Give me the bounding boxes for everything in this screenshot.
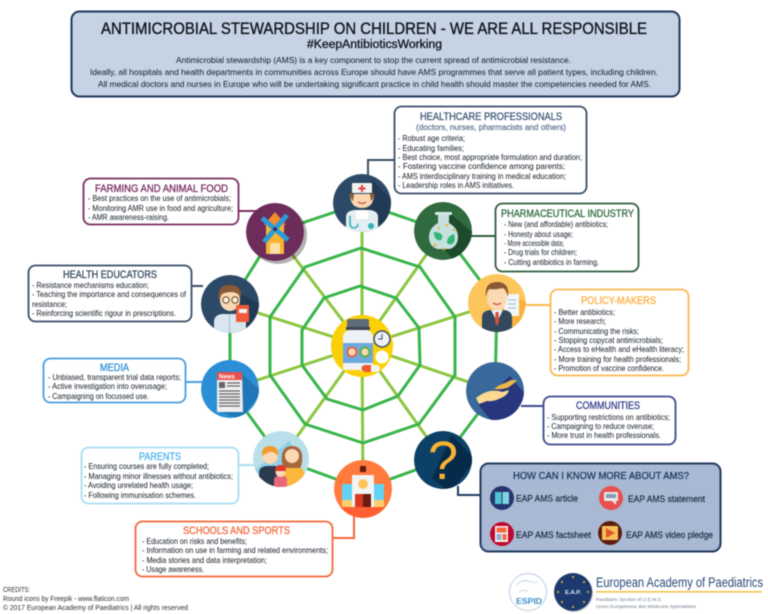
panel: farming and animal food: - Best practices on the use of antimicrobials; <box>88 194 231 203</box>
panel: policy-makers: POLICY-MAKERS <box>581 295 656 307</box>
icon: parents (family) <box>253 431 309 490</box>
credits: Round icons by Freepik - www.flaticon.com <box>3 594 129 603</box>
logo: ESPID: ESPID <box>516 597 542 606</box>
intro text: Antimicrobial stewardship (AMS) is a key component to stop the current spread of antimicrobial resistance. <box>176 55 571 65</box>
panel: policy-makers: - More training for health professionals; <box>554 355 681 364</box>
icon: question mark: ? <box>428 431 458 491</box>
panel: healthcare professionals <box>394 106 586 194</box>
panel: farming and animal food: - Monitoring AMR use in food and agriculture; <box>88 204 233 213</box>
panel: communities: - Campaigning to reduce overuse; <box>547 422 654 431</box>
icon: article <box>490 486 514 510</box>
panel: media: - Active investigation into overusage; <box>48 382 167 391</box>
logo: European Academy of Paediatrics <box>554 573 763 612</box>
panel: pharmaceutical industry: PHARMACEUTICAL INDUSTRY <box>501 208 634 220</box>
panel: health educators: - Reinforcing scientific rigour in prescriptions. <box>32 309 176 318</box>
panel: pharmaceutical industry: - Drug trials for children; <box>504 248 577 257</box>
panel: schools and sports <box>136 522 332 576</box>
panel: media: MEDIA <box>100 362 130 374</box>
connector lines <box>186 160 550 538</box>
panel: health educators: - Resistance mechanisms education; <box>32 281 149 290</box>
panel: media: - Campaigning on focussed use. <box>48 392 149 401</box>
icon: centre medicine bottle <box>331 315 393 377</box>
panel: schools and sports: - Usage awareness. <box>142 565 204 574</box>
icon: farming (windmill) <box>246 203 307 264</box>
icon: video pledge <box>598 521 622 545</box>
logo: European Academy of Paediatrics: Union Européenne des Médecins Spécialistes <box>596 604 697 610</box>
panel: communities: - More trust in health professionals. <box>547 431 661 440</box>
icon: statement <box>599 486 623 510</box>
panel: policy-makers: - Promotion of vaccine confidence. <box>554 364 664 373</box>
credits <box>3 585 188 612</box>
panel: media <box>44 358 186 402</box>
panel: healthcare professionals: - AMS interdisciplinary training in medical education; <box>398 172 566 181</box>
panel: health educators <box>28 266 192 322</box>
panel: communities: COMMUNITIES <box>576 400 640 412</box>
panel: healthcare professionals: - Fostering vaccine confidence among parents; <box>398 162 565 171</box>
label: article: EAP AMS article <box>516 494 578 504</box>
panel: policy-makers <box>550 290 688 376</box>
panel: pharmaceutical industry: - More accessible data; <box>504 239 564 248</box>
icon: pharmaceutical flask <box>414 202 475 262</box>
panel: policy-makers: - More research; <box>554 317 606 326</box>
panel: pharmaceutical industry <box>496 204 638 272</box>
intro text: Ideally, all hospitals and health departments in communities across Europe should have AMS programmes that serve all patient types, including children. <box>90 67 658 77</box>
logo: European Academy of Paediatrics: E.A.P. <box>565 590 582 596</box>
icon: media (newspaper): News <box>219 374 235 380</box>
label: video pledge: EAP AMS video pledge <box>626 530 713 541</box>
panel: schools and sports: SCHOOLS AND SPORTS <box>183 525 290 537</box>
icon: policy-maker <box>468 274 526 333</box>
label: factsheet: EAP AMS factsheet <box>516 530 591 541</box>
panel: healthcare professionals: - Best choice, most appropriate formulation and duration; <box>398 153 582 162</box>
icon: media (newspaper) <box>201 360 262 420</box>
icon: health educator <box>201 275 262 334</box>
panel: farming and animal food <box>84 178 238 224</box>
panel: healthcare professionals: - Educating families; <box>398 144 464 153</box>
intro text: All medical doctors and nurses in Europe who will be undertaking significant practice in child health should master the competencies needed for AMS. <box>98 79 651 89</box>
panel: policy-makers: - Stopping copycat antimicrobials; <box>554 336 663 345</box>
intro text <box>90 55 658 89</box>
panel: healthcare professionals: HEALTHCARE PROFESSIONALS <box>420 111 562 123</box>
icon: communities (hands) <box>466 362 526 422</box>
panel: how can I know more about AMS: HOW CAN I KNOW MORE ABOUT AMS? <box>513 470 689 482</box>
panel: health educators: resistance; <box>32 300 67 309</box>
credits: CREDITS: <box>3 585 30 594</box>
logo: European Academy of Paediatrics: Paediatric Section of U.E.M.S <box>596 597 661 603</box>
panel: parents: PARENTS <box>139 451 181 463</box>
panel: parents: - Managing minor illnesses without antibiotics; <box>84 472 233 481</box>
panel: communities <box>544 396 676 444</box>
panel: parents: - Following immunisation schemes. <box>84 491 196 500</box>
panel: communities: - Supporting restrictions on antibiotics; <box>547 413 670 422</box>
panel: pharmaceutical industry: - New (and affordable) antibiotics; <box>504 220 608 229</box>
panel: media: - Unbiased, transparent trial data reports; <box>48 373 181 382</box>
panel: schools and sports: - Information on use in farming and related environments; <box>142 546 328 555</box>
panel: policy-makers: - Better antibiotics; <box>554 308 615 317</box>
panel: healthcare professionals: - Leadership roles in AMS initiatives. <box>398 181 514 190</box>
credits: © 2017 European Academy of Paediatrics | All rights reserved <box>3 603 188 612</box>
icon: healthcare professional (nurse) <box>333 174 395 235</box>
panel: policy-makers: - Access to eHealth and eHealth literacy; <box>554 345 684 354</box>
title panel <box>72 12 680 96</box>
icon: question mark <box>414 431 475 492</box>
panel: healthcare professionals: - Robust age criteria; <box>398 134 465 143</box>
panel: parents: - Avoiding unrelated health usage; <box>84 481 193 490</box>
panel: how can I know more about AMS <box>480 464 720 552</box>
panel: health educators: HEALTH EDUCATORS <box>63 269 157 281</box>
icon: factsheet <box>490 522 514 546</box>
panel: policy-makers: - Communicating the risks; <box>554 327 639 336</box>
panel: schools and sports: - Media stories and data interpretation; <box>142 556 267 565</box>
panel: pharmaceutical industry: - Cutting antibiotics in farming. <box>504 258 599 267</box>
panel: health educators: - Teaching the importance and consequences of <box>32 290 187 299</box>
panel: pharmaceutical industry: - Honesty about usage; <box>504 230 573 239</box>
icon: schools and sports (building) <box>334 460 392 520</box>
panel: farming and animal food: FARMING AND ANIMAL FOOD <box>95 183 228 195</box>
panel: farming and animal food: - AMR awareness-raising. <box>88 213 169 222</box>
panel: schools and sports: - Education on risks and benefits; <box>142 537 247 546</box>
logo: ESPID <box>510 574 546 610</box>
web: spokes <box>230 203 497 489</box>
panel: healthcare professionals: (doctors, nurses, pharmacists and others) <box>416 122 566 132</box>
web: concentric rings <box>230 203 497 489</box>
hashtag: #KeepAntibioticsWorking <box>307 39 442 51</box>
label: statement: EAP AMS statement <box>628 494 705 505</box>
panel: parents <box>82 448 238 504</box>
main title: ANTIMICROBIAL STEWARDSHIP ON CHILDREN - WE ARE ALL RESPONSIBLE <box>101 20 647 38</box>
panel: parents: - Ensuring courses are fully completed; <box>84 462 209 471</box>
